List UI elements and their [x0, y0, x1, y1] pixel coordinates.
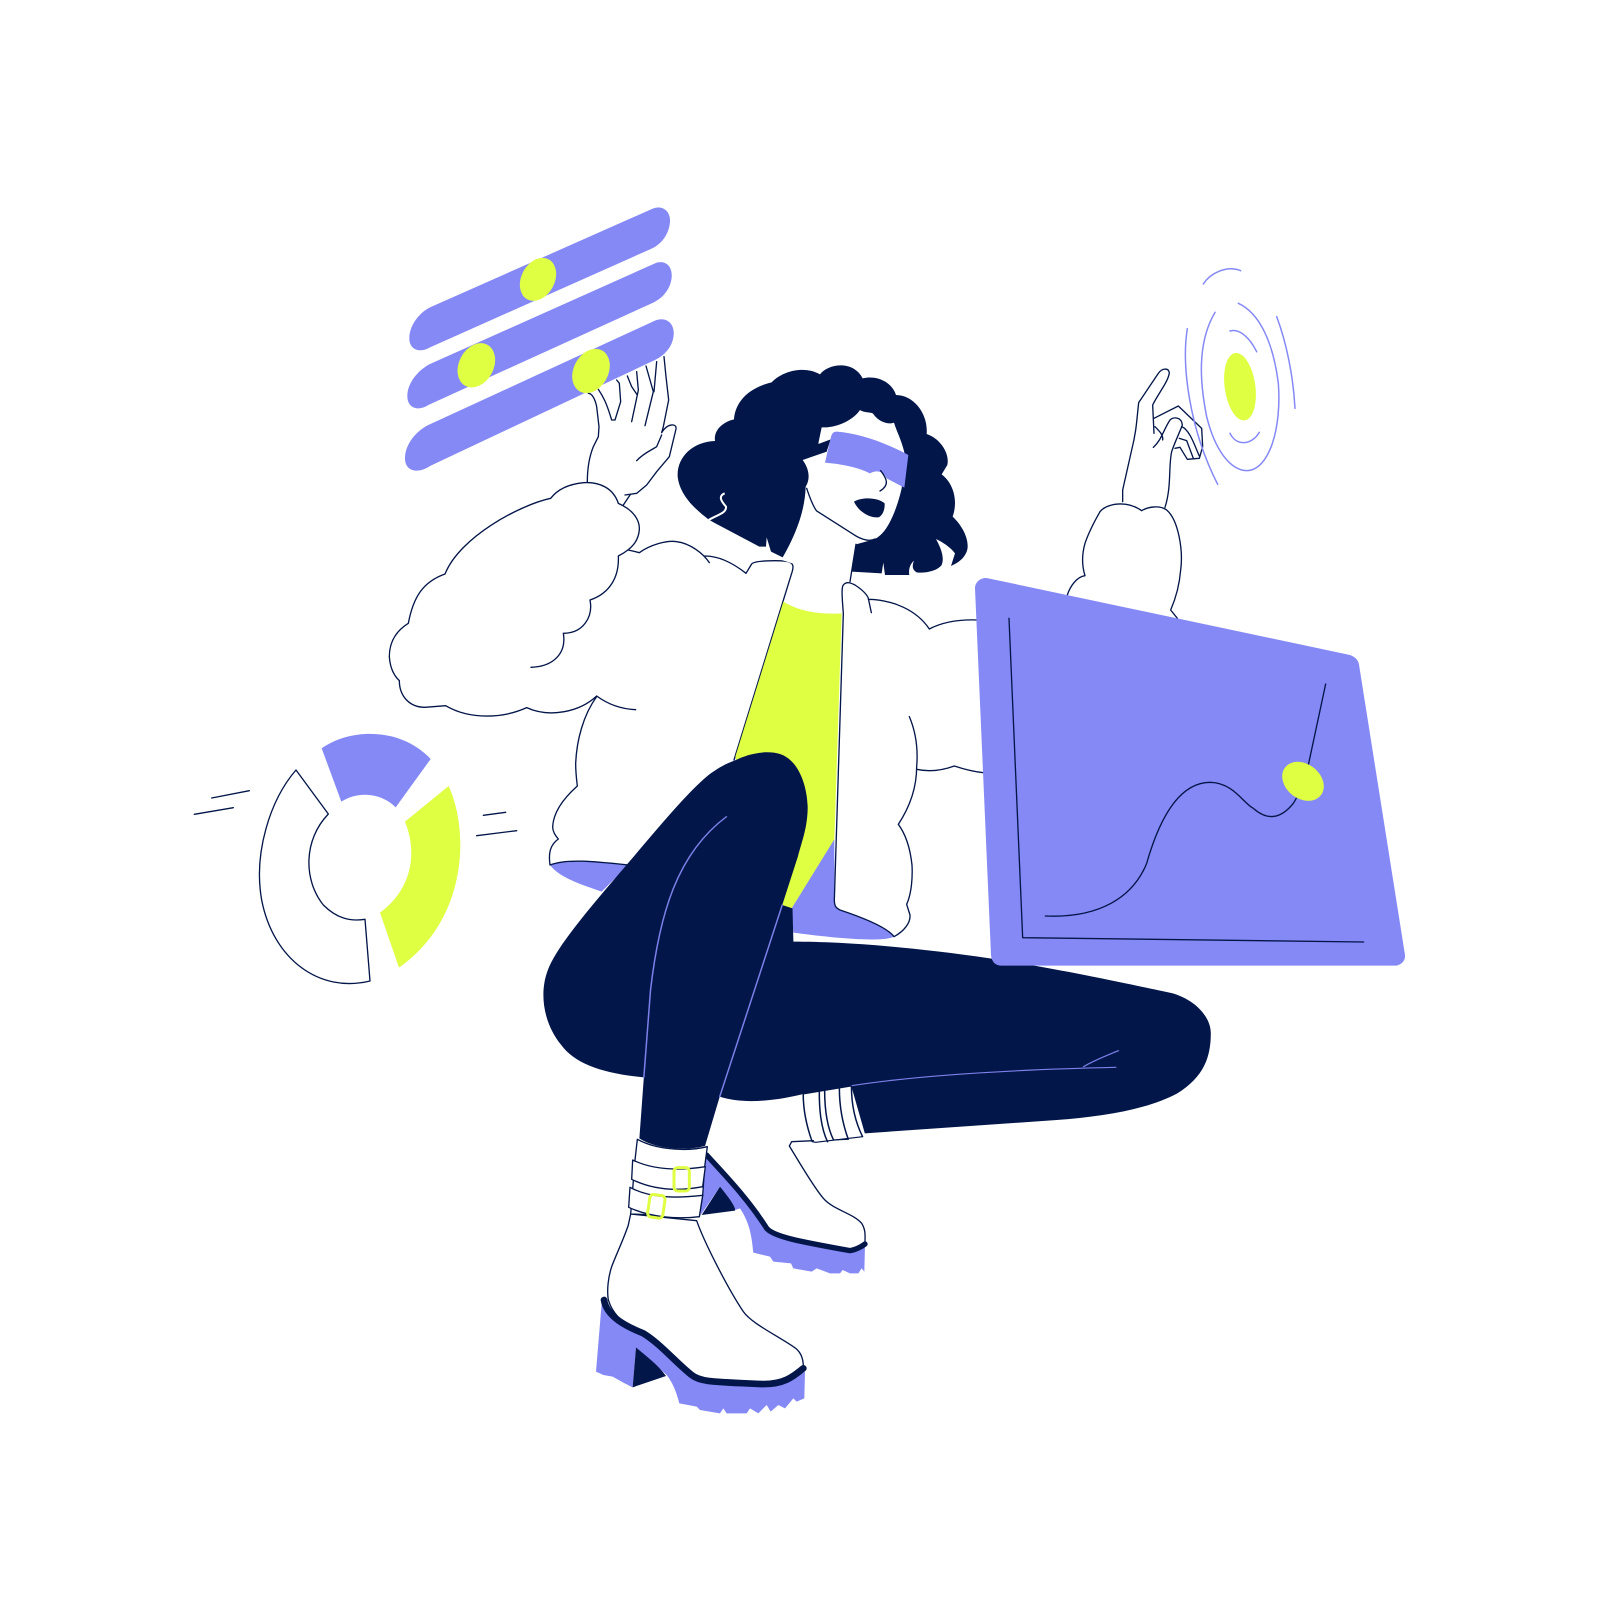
slider knobs	[450, 251, 617, 400]
sleeve cuff	[1067, 504, 1181, 618]
leggings seams	[644, 817, 1118, 1097]
buckles	[647, 1168, 689, 1219]
slider bars	[405, 207, 674, 471]
lime top	[735, 602, 842, 908]
sock	[803, 1086, 863, 1142]
visor	[825, 432, 908, 488]
hair	[678, 365, 968, 575]
back boot heel	[702, 1187, 735, 1215]
front boot upper	[608, 1214, 803, 1384]
hair squiggle	[709, 493, 726, 520]
legs	[543, 752, 1211, 1149]
top, lining and right jacket panel	[735, 583, 983, 939]
lining	[792, 839, 894, 939]
donut chart	[194, 734, 517, 984]
back boot sole	[701, 1157, 865, 1273]
nose	[880, 471, 886, 491]
hair strand	[803, 439, 831, 459]
front boot heel	[633, 1347, 666, 1387]
white segment	[260, 770, 370, 984]
jaw line	[807, 488, 875, 582]
ripples	[1185, 269, 1295, 484]
lime segment	[380, 786, 460, 968]
chart marker	[1274, 754, 1332, 809]
leggings	[543, 752, 1211, 1149]
boot cuff	[631, 1139, 707, 1217]
right hand and sleeve	[1067, 369, 1203, 618]
panel background	[975, 578, 1405, 966]
touch target with ripples	[1185, 269, 1295, 484]
right jacket panel	[834, 583, 983, 937]
target dot	[1220, 351, 1260, 422]
chart curve	[1045, 684, 1326, 916]
face and neck	[782, 410, 905, 582]
front boot	[596, 1139, 805, 1413]
jacket lining	[550, 862, 628, 892]
back boot welt	[707, 1155, 865, 1251]
front boot welt	[604, 1300, 803, 1384]
strap upper	[632, 1160, 705, 1189]
jacket: left sleeve and body	[389, 483, 793, 892]
sliders panel	[405, 207, 674, 471]
mouth	[854, 498, 885, 517]
strap lower	[629, 1187, 703, 1218]
left hand	[587, 357, 676, 505]
back boot upper	[789, 1141, 865, 1242]
hand	[1123, 369, 1203, 507]
chart axes	[1009, 618, 1364, 942]
chart panel	[975, 578, 1405, 966]
purple segment	[322, 734, 431, 807]
motion ticks	[194, 791, 517, 836]
front boot sole	[596, 1303, 805, 1413]
back boot	[701, 1141, 865, 1273]
hair and face	[678, 365, 968, 582]
